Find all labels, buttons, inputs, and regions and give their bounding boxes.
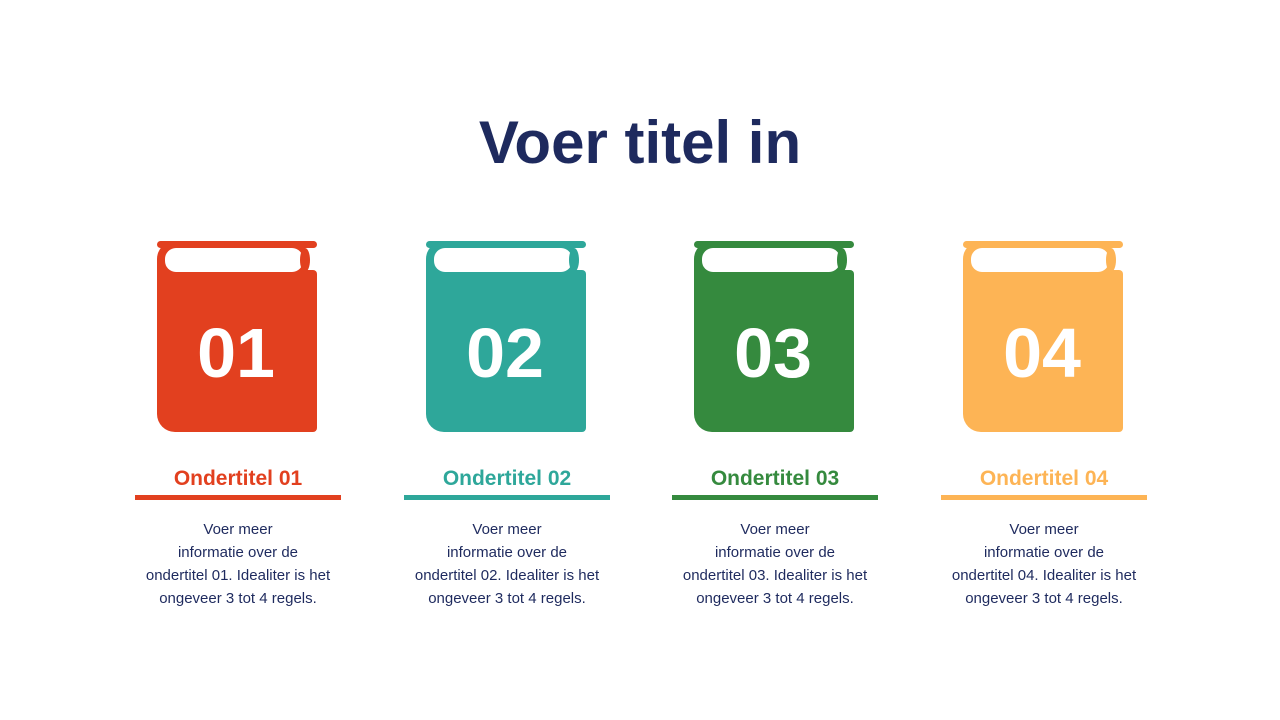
column 1 <box>135 241 341 607</box>
column 4 <box>941 241 1147 607</box>
text 03: ondertitel 03. Idealiter is het <box>683 567 867 584</box>
text 04: informatie over de <box>984 544 1104 561</box>
text 04: ondertitel 04. Idealiter is het <box>952 567 1136 584</box>
text 02: Voer meer <box>472 521 542 538</box>
text 03: informatie over de <box>715 544 835 561</box>
subtitle 02: Ondertitel 02 <box>443 467 571 490</box>
icon: book 04 <box>963 241 1123 432</box>
text 01: ondertitel 01. Idealiter is het <box>146 567 330 584</box>
text 04: Voer meer <box>1009 521 1079 538</box>
text 02: ongeveer 3 tot 4 regels. <box>428 590 586 607</box>
icon: book 02: 02 <box>466 314 544 392</box>
title: Voer titel in <box>479 109 801 176</box>
subtitle 04: Ondertitel 04 <box>980 467 1108 490</box>
text 01: informatie over de <box>178 544 298 561</box>
column 3 <box>672 241 878 607</box>
icon: book 01 <box>157 241 317 432</box>
icon: book 01: 01 <box>197 314 275 392</box>
icon: book 03: 03 <box>734 314 812 392</box>
text 04: ongeveer 3 tot 4 regels. <box>965 590 1123 607</box>
text 04 <box>952 521 1136 607</box>
text 02: informatie over de <box>447 544 567 561</box>
subtitle 03: Ondertitel 03 <box>711 467 839 490</box>
subtitle 01: Ondertitel 01 <box>174 467 302 490</box>
text 01: Voer meer <box>203 521 273 538</box>
text 01 <box>146 521 330 607</box>
text 03: Voer meer <box>740 521 810 538</box>
text 02: ondertitel 02. Idealiter is het <box>415 567 599 584</box>
text 02 <box>415 521 600 607</box>
icon: book 04: 04 <box>1003 314 1081 392</box>
text 03 <box>683 521 868 607</box>
icon: book 02 <box>426 241 586 432</box>
icon: book 03 <box>694 241 854 432</box>
column 2 <box>404 241 610 607</box>
text 01: ongeveer 3 tot 4 regels. <box>159 590 317 607</box>
text 03: ongeveer 3 tot 4 regels. <box>696 590 854 607</box>
